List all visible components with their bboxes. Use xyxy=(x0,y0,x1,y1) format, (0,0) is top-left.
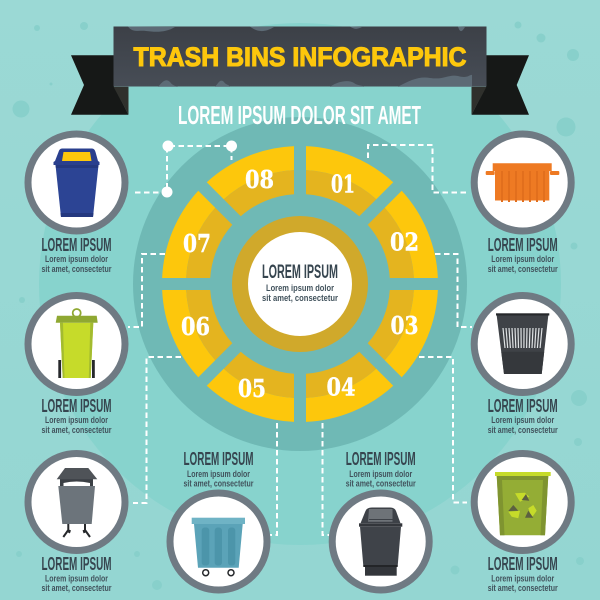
panel: gray street bin xyxy=(28,454,125,593)
icon: teal container xyxy=(192,518,245,576)
segment 08 xyxy=(207,121,318,232)
description: Lorem ipsum dolor xyxy=(491,415,555,425)
segment 05 xyxy=(207,352,294,422)
description: Lorem ipsum dolor xyxy=(45,254,108,264)
connector lines xyxy=(128,140,472,535)
number 03: 03 xyxy=(390,311,418,340)
description xyxy=(42,574,112,593)
title banner xyxy=(71,26,529,115)
label: LOREM IPSUM xyxy=(184,448,254,469)
panel: orange dumpster xyxy=(474,134,571,274)
description: Lorem ipsum dolor xyxy=(349,469,413,479)
description: sit amet, consectetur xyxy=(184,478,254,488)
description: Lorem ipsum dolor xyxy=(45,415,108,425)
description: Lorem ipsum dolor xyxy=(491,574,555,584)
panel: dark flip-lid bin xyxy=(332,448,429,590)
icon: orange dumpster xyxy=(486,163,559,202)
number 01: 01 xyxy=(331,170,355,198)
panel: blue bin xyxy=(28,134,125,274)
panel: black mesh bin xyxy=(474,296,571,435)
label: LOREM IPSUM xyxy=(42,395,112,416)
segment 07 xyxy=(162,191,232,278)
number 07: 07 xyxy=(183,229,211,258)
description: sit amet, consectetur xyxy=(488,583,558,593)
description: sit amet, consectetur xyxy=(42,583,112,593)
icon: mesh bin xyxy=(496,313,549,374)
ribbon tail right xyxy=(472,55,529,115)
description xyxy=(42,415,112,435)
number 05: 05 xyxy=(238,374,266,403)
icon: recycling arrows xyxy=(508,493,537,518)
ribbon tail left xyxy=(71,55,128,115)
subtitle: LOREM IPSUM DOLOR SIT AMET xyxy=(178,102,421,130)
description: Lorem ipsum dolor xyxy=(187,469,250,479)
number 04: 04 xyxy=(326,373,356,402)
description: sit amet, consectetur xyxy=(488,425,558,435)
wheel chart xyxy=(137,121,463,447)
description: sit amet, consectetur xyxy=(346,478,416,488)
number 08: 08 xyxy=(245,165,274,194)
center hub xyxy=(232,216,368,352)
icon: gray street bin xyxy=(57,468,97,537)
panel: green recycling bin xyxy=(474,454,571,593)
segment 03 xyxy=(368,290,438,377)
label: LOREM IPSUM xyxy=(346,448,416,469)
panel: green wheeled bin xyxy=(28,296,125,435)
description: Lorem ipsum dolor xyxy=(491,254,555,264)
description xyxy=(488,254,558,274)
description xyxy=(42,254,112,274)
description xyxy=(488,415,558,435)
icon: blue bin xyxy=(54,148,100,217)
center hub: sit amet, consectetur xyxy=(262,293,338,303)
icon: dark flip-lid bin xyxy=(359,508,402,576)
label: LOREM IPSUM xyxy=(42,234,112,255)
description: Lorem ipsum dolor xyxy=(45,574,108,584)
segment 01 xyxy=(306,146,393,216)
title text: TRASH BINS INFOGRAPHIC xyxy=(134,42,466,72)
description: sit amet, consectetur xyxy=(42,264,112,274)
segment 06 xyxy=(137,266,248,377)
center heading: LOREM IPSUM xyxy=(262,262,338,283)
segment 02 xyxy=(352,191,463,302)
description xyxy=(488,574,558,593)
segment 04 xyxy=(282,336,393,447)
number 06: 06 xyxy=(181,312,210,341)
icon: recycling bin xyxy=(495,472,551,535)
label: LOREM IPSUM xyxy=(42,553,112,574)
description xyxy=(346,469,416,488)
panel: teal wheeled container xyxy=(170,448,267,590)
description: sit amet, consectetur xyxy=(42,425,112,435)
description: sit amet, consectetur xyxy=(488,264,558,274)
center text: Lorem ipsum dolor xyxy=(266,283,334,293)
description xyxy=(184,469,254,488)
number 02: 02 xyxy=(390,228,419,257)
icon: green wheeled bin xyxy=(56,309,98,378)
